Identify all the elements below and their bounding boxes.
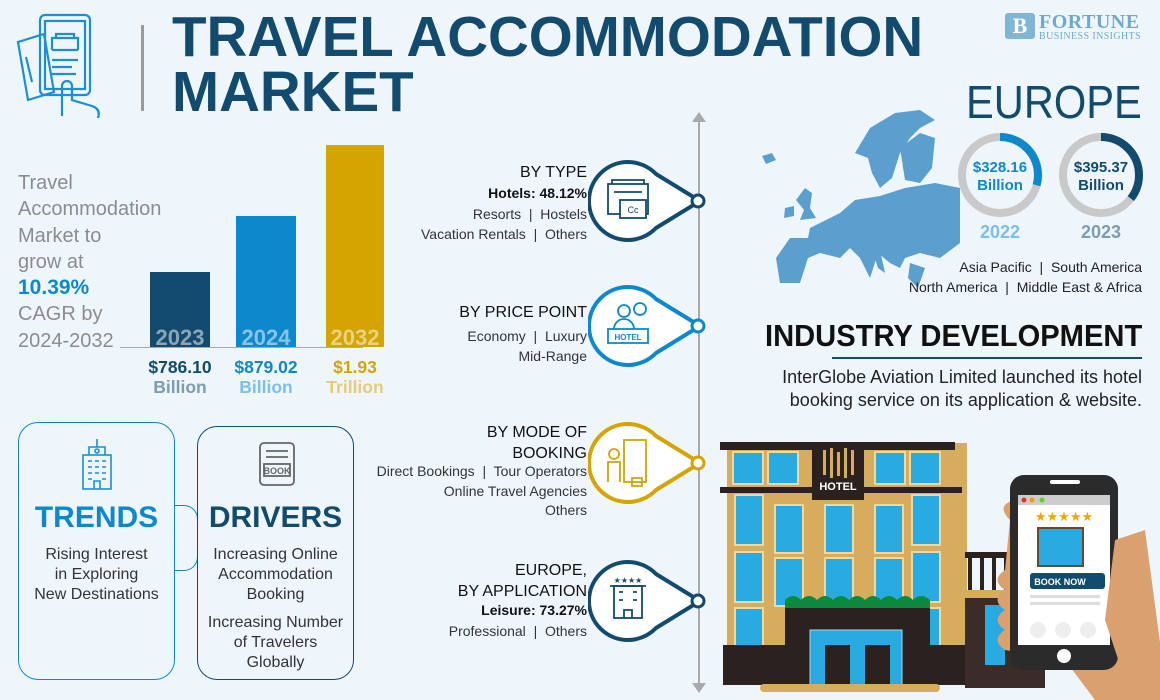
segment: europe by application: BY APPLICATION bbox=[458, 583, 587, 600]
segment: by mode of booking bbox=[377, 422, 706, 518]
segment: by type: BY TYPE bbox=[520, 164, 587, 181]
icon: building bbox=[82, 439, 112, 490]
logo: fortune business insights: BUSINESS INSIGHTS bbox=[1039, 31, 1141, 42]
icon: hotel reception bbox=[588, 285, 706, 367]
icon: circle bed bbox=[588, 160, 706, 242]
segment: by type: Resorts | Hostels bbox=[473, 206, 587, 222]
donut: 2022: Billion bbox=[977, 177, 1023, 194]
text: regions: Asia Pacific | South America bbox=[959, 259, 1142, 275]
bar chart: $879.02 bbox=[234, 357, 298, 377]
panel: drivers: Booking bbox=[247, 586, 304, 603]
illustration: hotel and phone: BOOK NOW bbox=[1034, 577, 1086, 587]
text: cagr statement bbox=[18, 172, 161, 352]
bar chart: $786.10 bbox=[148, 357, 212, 377]
text: cagr statement: CAGR by bbox=[18, 303, 102, 325]
donut: 2023 bbox=[1059, 133, 1143, 242]
segment: by mode of booking: Online Travel Agencies bbox=[444, 482, 587, 498]
icon: circle bed: Cc bbox=[628, 205, 639, 215]
segment: by mode of booking: Direct Bookings | Tour Operators bbox=[377, 463, 587, 479]
title: TRAVEL ACCOMMODATION bbox=[172, 5, 923, 68]
donut: 2023: Billion bbox=[1078, 177, 1124, 194]
segment: by price point: Mid-Range bbox=[519, 348, 587, 364]
text: cagr statement: Market to bbox=[18, 225, 101, 247]
panel: drivers: Globally bbox=[247, 654, 304, 671]
heading: europe: EUROPE bbox=[966, 76, 1142, 128]
segment: by type: Hotels: 48.12% bbox=[488, 185, 587, 201]
segment: europe by application: EUROPE, bbox=[515, 562, 587, 579]
text: industry development bbox=[782, 367, 1142, 410]
panel: trends bbox=[18, 422, 175, 680]
title: MARKET bbox=[172, 60, 414, 123]
bar chart bbox=[120, 145, 384, 397]
bar chart: Billion bbox=[153, 377, 207, 397]
text: industry development: booking service on its application & website. bbox=[790, 390, 1142, 410]
panel: trends: New Destinations bbox=[34, 586, 159, 603]
segment: europe by application bbox=[449, 560, 706, 642]
icon: phone booking bbox=[16, 14, 100, 118]
panel: trends: in Exploring bbox=[55, 566, 138, 583]
divider bbox=[141, 25, 144, 111]
segment: by mode of booking: Others bbox=[545, 502, 587, 518]
segment: by price point bbox=[459, 285, 706, 367]
text: cagr statement: 2024-2032 bbox=[18, 330, 114, 352]
text: cagr statement: Travel bbox=[18, 172, 73, 194]
donut: 2023: $395.37 bbox=[1074, 159, 1128, 176]
icon: book: BOOK bbox=[264, 466, 291, 476]
map: europe bbox=[762, 110, 960, 288]
bar chart: 2023 bbox=[156, 325, 204, 350]
segment: by type: Vacation Rentals | Others bbox=[421, 226, 587, 242]
panel: trends: TRENDS bbox=[35, 501, 158, 534]
segment: europe by application: Leisure: 73.27% bbox=[481, 602, 587, 618]
panel: drivers: Increasing Number bbox=[208, 614, 343, 631]
illustration: hotel and phone: HOTEL bbox=[819, 481, 857, 493]
text: industry development: InterGlobe Aviation Limited launched its hotel bbox=[782, 367, 1142, 387]
center axis with arrows bbox=[692, 112, 706, 693]
panel: drivers bbox=[197, 426, 354, 680]
donut: 2022: $328.16 bbox=[973, 159, 1027, 176]
icon: hotel building: ★★★★ bbox=[614, 576, 642, 585]
segment: by type bbox=[421, 160, 706, 242]
panel: drivers: of Travelers bbox=[234, 634, 317, 651]
text: cagr statement: 10.39% bbox=[18, 276, 89, 299]
text: cagr statement: Accommodation bbox=[18, 198, 161, 220]
panel: drivers: DRIVERS bbox=[209, 501, 342, 534]
connector between trends and drivers bbox=[174, 505, 198, 571]
illustration: hotel and phone: ★★★★★ bbox=[1035, 509, 1093, 524]
logo: fortune business insights bbox=[1005, 11, 1141, 42]
donut: 2022: 2022 bbox=[980, 222, 1020, 242]
icon: hotel reception: HOTEL bbox=[614, 333, 642, 342]
text: cagr statement: grow at bbox=[18, 251, 84, 273]
donut: 2023: 2023 bbox=[1081, 222, 1121, 242]
logo: fortune business insights: FORTUNE bbox=[1039, 11, 1140, 33]
donut: 2022 bbox=[958, 133, 1042, 242]
logo: fortune business insights: B bbox=[1013, 13, 1027, 38]
bar chart: $1.93 bbox=[333, 357, 377, 377]
segment: by price point: Economy | Luxury bbox=[467, 328, 587, 344]
illustration: hotel and phone bbox=[720, 442, 1160, 700]
title bbox=[172, 5, 923, 123]
panel: drivers: Accommodation bbox=[218, 566, 333, 583]
segment: by mode of booking: BY MODE OF bbox=[487, 424, 587, 441]
icon: book bbox=[259, 442, 295, 486]
bar chart: 2032 bbox=[331, 325, 379, 350]
bar chart: Billion bbox=[239, 377, 293, 397]
icon: traveler bbox=[588, 422, 706, 504]
panel: trends: Rising Interest bbox=[45, 546, 148, 563]
text: regions bbox=[909, 259, 1142, 295]
text: regions: North America | Middle East & Africa bbox=[909, 279, 1142, 295]
icon: hotel building bbox=[588, 560, 706, 642]
segment: by mode of booking: BOOKING bbox=[512, 445, 587, 462]
segment: europe by application: Professional | Others bbox=[449, 623, 587, 639]
segment: by price point: BY PRICE POINT bbox=[459, 304, 587, 321]
bar chart: Trillion bbox=[326, 377, 384, 397]
panel: drivers: Increasing Online bbox=[213, 546, 338, 563]
bar chart: 2024 bbox=[242, 325, 290, 350]
heading: industry development: INDUSTRY DEVELOPMENT bbox=[765, 318, 1142, 353]
